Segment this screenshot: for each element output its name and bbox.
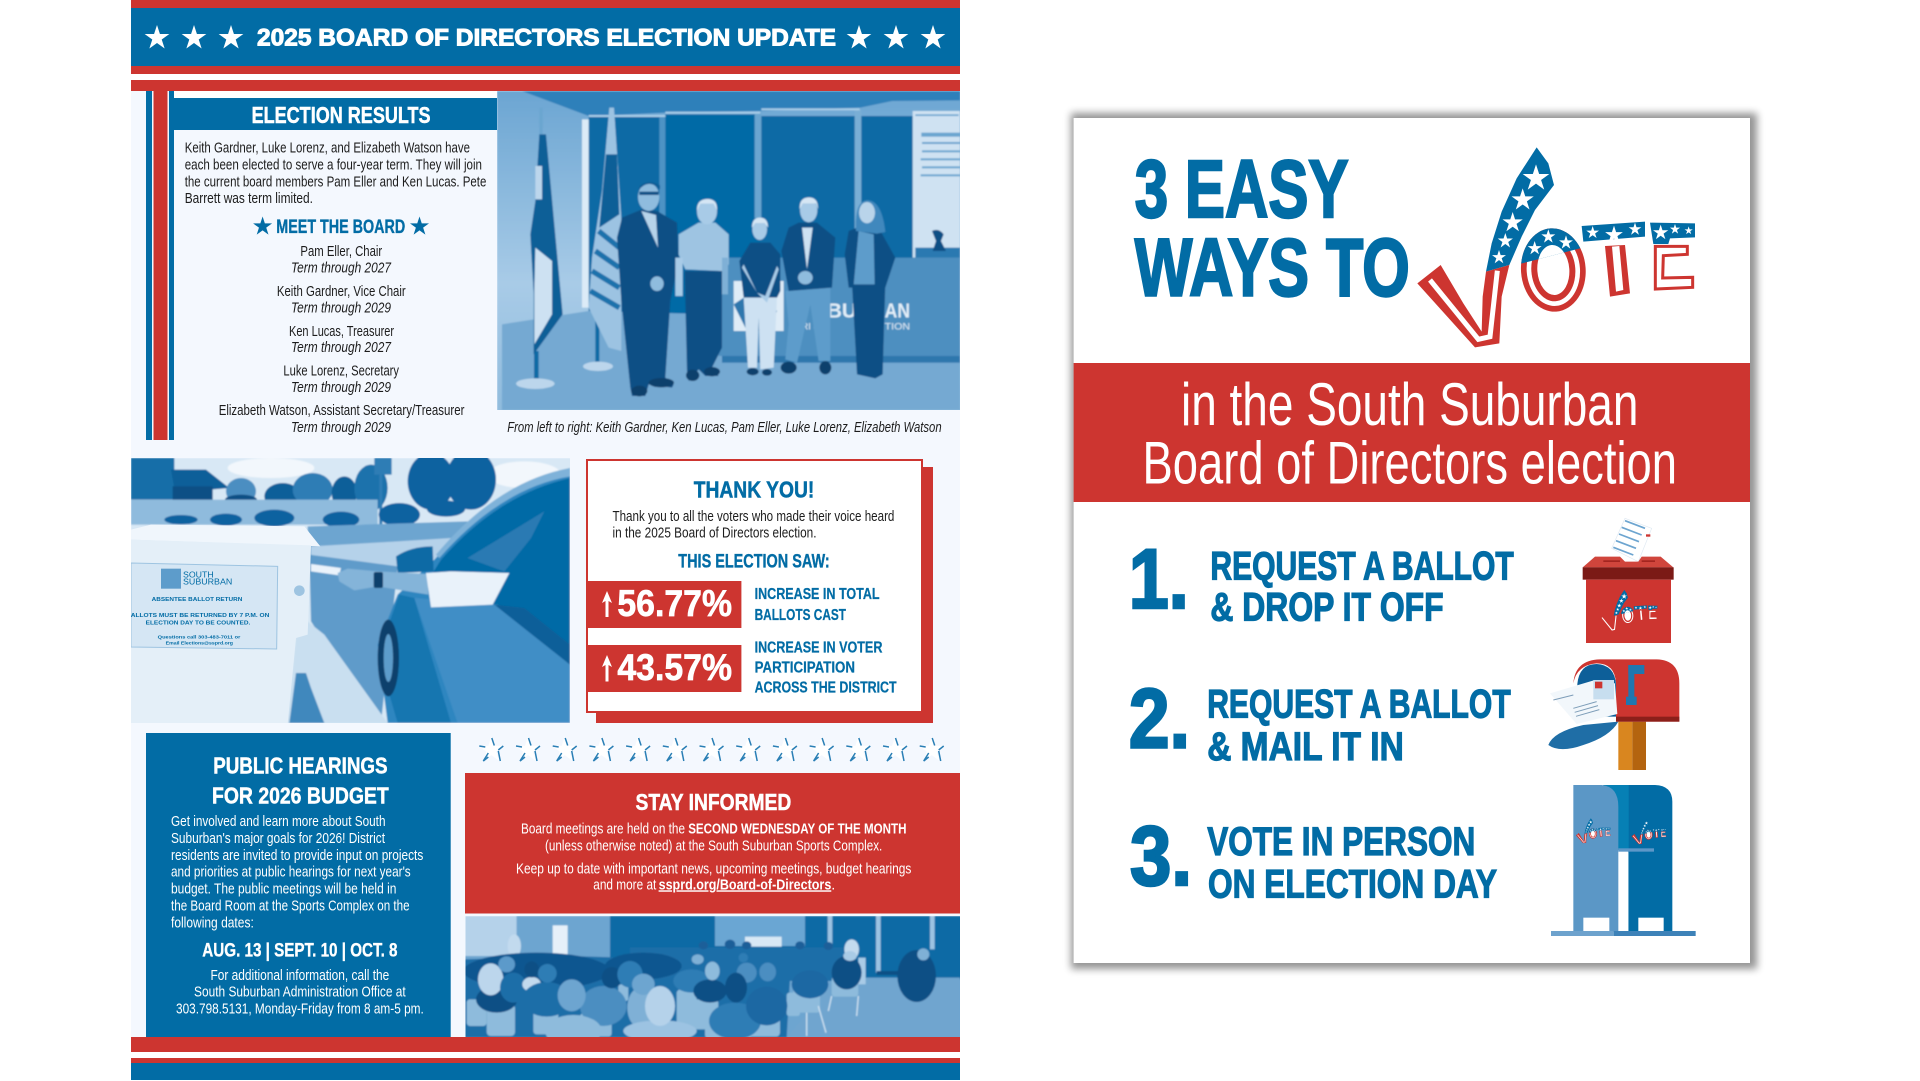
icon: mailbox [1548,659,1679,770]
hearings paragraph: and priorities at public hearings for next year's [171,865,411,881]
step 2: mail in: & MAIL IT IN [1207,725,1404,769]
photo: board members standing together: BU [827,300,857,323]
title: 3 easy ways to [1135,144,1410,314]
website note: ssprd.org/Board-of-Directors [659,877,831,893]
heading: thank you: THANK YOU! [694,477,814,503]
stat: ballots cast: BALLOTS CAST [755,607,846,624]
icon: patriotic vote logo [1417,147,1695,347]
photo: board members standing together: TION [885,322,910,332]
photo: voter returning ballot at drop box: ELECTION DAY TO BE COUNTED. [146,621,251,627]
subheading: this election saw: THIS ELECTION SAW: [678,552,830,573]
step 1: drop off: 1. [1129,532,1189,626]
photo: board members standing together: ARI & R [795,322,829,332]
step 3: vote in person: ON ELECTION DAY [1208,862,1497,906]
panel: public hearings [146,733,451,1037]
website note: and more at [593,877,656,893]
red band: in the south suburban election: in the South Suburban [1181,371,1638,438]
heading: stay informed: STAY INFORMED [636,789,791,815]
thank you message: Thank you to all the voters who made their voice heard [612,509,894,525]
additional information [176,968,424,1017]
hearing dates: AUG. 13 | SEPT. 10 | OCT. 8 [202,941,398,962]
step 2: mail in: 2. [1129,671,1190,765]
step 3: vote in person [1130,809,1497,906]
board member list: Pam Eller, Chair [300,244,382,260]
website note: Keep up to date with important news, upcoming meetings, budget hearings [516,862,911,878]
photo: voter returning ballot at drop box: SOUTH [183,569,214,579]
heading: public hearings: PUBLIC HEARINGS [213,752,388,778]
results paragraph: each been elected to serve a four-year term. They will join [185,158,482,174]
meeting schedule: SECOND WEDNESDAY OF THE MONTH [688,821,906,837]
board member list: Ken Lucas, Treasurer [289,324,394,340]
banner title: 2025 BOARD OF DIRECTORS ELECTION UPDATE [257,25,836,52]
results paragraph: Barrett was term limited. [185,191,313,207]
stat: voter participation: ACROSS THE DISTRICT [755,680,897,697]
website note [516,862,911,893]
panel: election results [146,91,497,440]
stat: voter participation: INCREASE IN VOTER [755,640,883,657]
decorative star row [478,736,945,761]
results paragraph: the current board members Pam Eller and Ken Lucas. Pete [185,175,486,191]
stat: ballots cast: INCREASE IN TOTAL [755,586,880,603]
stat: voter participation: 43.57% [617,647,732,688]
icon: ballot box [1583,518,1674,643]
hearings paragraph: budget. The public meetings will be held in [171,882,396,898]
photo: voter returning ballot at drop box: SUBURBAN [183,577,232,587]
stat: voter participation: PARTICIPATION [755,660,855,677]
board member list: Luke Lorenz, Secretary [283,363,400,379]
panel: stay informed [465,773,960,914]
results paragraph: Keith Gardner, Luke Lorenz, and Elizabeth Watson have [185,141,470,157]
meeting schedule [521,821,906,854]
meeting schedule: Board meetings are held on the [521,821,685,837]
photo: board members standing together [497,91,964,411]
photo: voter returning ballot at drop box: Email Elections@ssprd.org [166,640,233,645]
bottom banner [131,1037,960,1080]
additional information: South Suburban Administration Office at [194,985,406,1001]
board member list: Term through 2029 [291,380,391,396]
panel: 3 easy ways to vote card [1071,113,1757,969]
board member list: Keith Gardner, Vice Chair [277,284,406,300]
hearings paragraph [171,814,423,931]
additional information: 303.798.5131, Monday-Friday from 8 am-5 pm. [176,1001,424,1017]
thank you message: in the 2025 Board of Directors election. [612,526,816,542]
title: 3 easy ways to: WAYS TO [1135,223,1410,314]
icon: voting booths [1551,785,1696,936]
hearings paragraph: residents are invited to provide input on projects [171,848,423,864]
heading: public hearings [212,752,389,808]
heading: meet the board: MEET THE BOARD [276,217,405,238]
step 3: vote in person: 3. [1130,809,1192,903]
step 3: vote in person: VOTE IN PERSON [1207,820,1475,864]
results paragraph [185,141,486,207]
website note: . [831,877,835,893]
board member list: Term through 2027 [291,261,392,277]
red band: in the south suburban election: Board of Directors election [1142,429,1677,496]
stat: ballots cast [586,581,880,628]
heading: election results: ELECTION RESULTS [252,102,431,128]
additional information: For additional information, call the [210,968,389,984]
stat: ballots cast: 56.77% [617,583,732,624]
stat: voter participation [586,640,897,697]
board member list: Term through 2027 [291,340,392,356]
board member list [219,244,465,436]
board member list: Term through 2029 [291,301,391,317]
hearings paragraph: Suburban's major goals for 2026! District [171,831,385,847]
step 2: mail in: REQUEST A BALLOT [1207,683,1511,727]
thank you message [612,509,894,542]
red band: in the south suburban election [1074,363,1750,502]
panel: thank you [586,460,933,723]
photo: board members standing together: AN [885,300,910,323]
board member list: Term through 2029 [291,420,391,436]
meeting schedule: (unless otherwise noted) at the South Suburban Sports Complex. [545,838,882,854]
step 1: drop off: REQUEST A BALLOT [1210,544,1514,588]
step 1: drop off: & DROP IT OFF [1210,586,1444,630]
photo: voter returning ballot at drop box [126,450,571,725]
panel: election update newsletter [126,0,964,1080]
photo: audience at board meeting [463,916,963,1047]
photo: voter returning ballot at drop box: Questions call 303-483-7011 or [158,634,241,639]
hearings paragraph: the Board Room at the Sports Complex on the [171,898,410,914]
title: 3 easy ways to: 3 EASY [1135,144,1348,235]
step 2: mail in [1129,671,1511,769]
hearings paragraph: following dates: [171,915,254,931]
top banner [131,0,960,91]
board member list: Elizabeth Watson, Assistant Secretary/Treasurer [219,403,465,419]
heading: public hearings: FOR 2026 BUDGET [212,782,389,808]
photo: voter returning ballot at drop box: ABSENTEE BALLOT RETURN [152,597,242,603]
caption: photo names: From left to right: Keith Gardner, Ken Lucas, Pam Eller, Luke Lorenz, Elizabeth Watson [507,420,942,436]
hearings paragraph: Get involved and learn more about South [171,814,386,830]
photo: voter returning ballot at drop box: BALLOTS MUST BE RETURNED BY 7 P.M. ON [126,613,269,619]
step 1: drop off [1129,532,1514,630]
